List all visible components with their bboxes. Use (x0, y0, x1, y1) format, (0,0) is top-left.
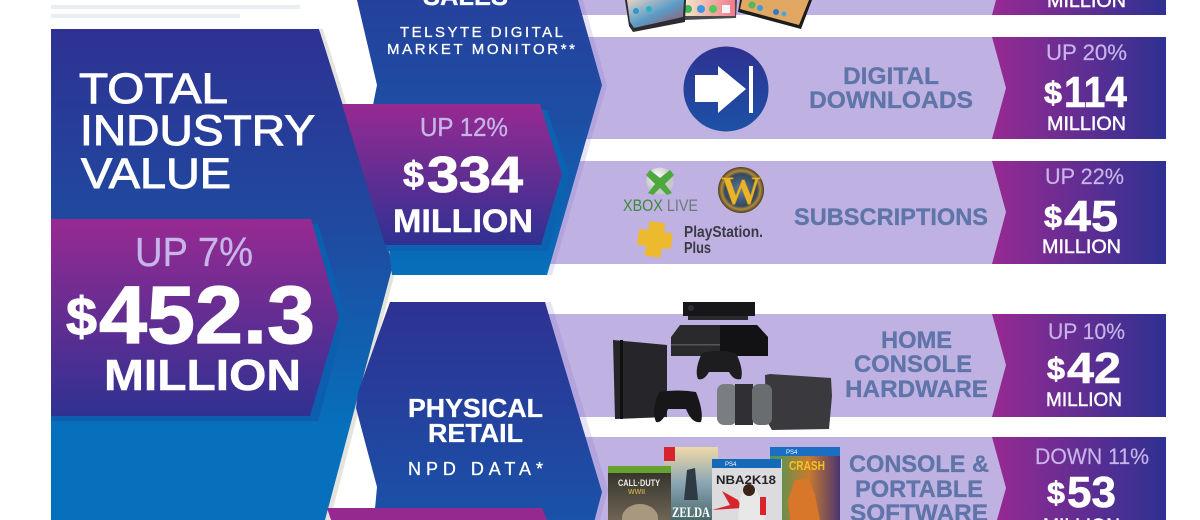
sales value badge (342, 104, 562, 245)
image: game covers: NBA2K18 (716, 473, 776, 487)
total heading: INDUSTRY (80, 107, 315, 155)
panel: mobile row (500, 0, 1166, 15)
sales source (387, 24, 575, 58)
sales value shadow (345, 110, 569, 251)
software label (849, 451, 989, 520)
total value badge: $ (66, 287, 97, 347)
physical retail heading: RETAIL (428, 418, 523, 448)
total heading: VALUE (81, 150, 231, 198)
hardware value: 42 (1067, 344, 1121, 393)
icon: playstation plus: PlayStation. (684, 224, 763, 241)
total heading (79, 65, 315, 198)
digital downloads label: DIGITAL (843, 63, 939, 90)
software label: CONSOLE & (849, 451, 989, 478)
subscriptions value (992, 161, 1166, 264)
hardware value: MILLION (1046, 390, 1122, 411)
digital downloads value: 114 (1064, 68, 1127, 117)
hardware label (845, 327, 988, 403)
sales value badge: 334 (427, 146, 524, 203)
image: game covers: CRASH (789, 458, 825, 473)
total value badge: MILLION (104, 351, 301, 400)
digital downloads label (809, 63, 973, 114)
panel: digital downloads row (500, 37, 1166, 139)
digital downloads label: DOWNLOADS (809, 87, 973, 114)
panel: mobile sales (342, 0, 602, 275)
sales value badge: UP 12% (420, 112, 508, 142)
hardware value: UP 10% (1048, 319, 1125, 344)
icon: playstation plus (636, 220, 763, 259)
software value (992, 437, 1166, 520)
image: game covers: PS4 (786, 450, 798, 456)
icon: world of warcraft: W (721, 168, 761, 213)
subscriptions value: 45 (1064, 192, 1118, 241)
sales value badge: $ (403, 154, 424, 195)
total value badge (51, 219, 339, 416)
hardware value: $ (1047, 351, 1065, 386)
panel: physical retail (327, 302, 602, 520)
digital downloads value: MILLION (1047, 114, 1126, 135)
sales source: TELSYTE DIGITAL (400, 24, 563, 41)
icon: xbox live (623, 168, 698, 215)
subscriptions value: $ (1044, 199, 1062, 234)
physical retail heading (408, 393, 543, 448)
hardware label: HARDWARE (845, 376, 988, 403)
image: consoles (613, 302, 832, 430)
total value badge: UP 7% (135, 229, 253, 275)
light shadows of the blue shapes (540, 0, 608, 520)
hardware value (992, 314, 1166, 417)
digital downloads value: $ (1044, 75, 1062, 110)
icon: xbox live: XBOX LIVE (623, 196, 698, 215)
software value: DOWN 11% (1035, 444, 1149, 469)
digital downloads value: UP 20% (1046, 40, 1127, 65)
image: mobile devices (625, 0, 812, 32)
icon: download arrow (684, 46, 768, 132)
panel: console and portable software row (500, 437, 1166, 520)
subscriptions value: MILLION (1042, 237, 1121, 258)
icon: playstation plus: Plus (684, 240, 711, 257)
image: game covers (608, 447, 840, 520)
panel: total industry value (51, 29, 393, 520)
total value shadow (51, 224, 346, 421)
physical retail value badge (327, 508, 547, 520)
hardware label: CONSOLE (854, 351, 972, 378)
hardware label: HOME (881, 327, 952, 354)
physical retail heading: PHYSICAL (408, 393, 543, 423)
image: game covers: CALL·DUTY (618, 478, 660, 488)
software value: 53 (1067, 468, 1116, 517)
software label: PORTABLE (855, 476, 983, 503)
total value badge: 452.3 (99, 270, 315, 361)
software value: $ (1047, 475, 1065, 510)
subscriptions value: UP 22% (1045, 164, 1124, 189)
subscriptions label: SUBSCRIPTIONS (794, 204, 988, 231)
mobile row value (992, 0, 1166, 15)
sales value badge: MILLION (393, 203, 533, 239)
panel: subscriptions row (500, 161, 1166, 264)
physical retail source: NPD DATA* (408, 459, 543, 479)
panel: home console hardware row (500, 302, 1166, 430)
sales source: MARKET MONITOR** (387, 41, 575, 58)
intro text lines (51, 5, 300, 18)
image: game covers: WWII (628, 489, 645, 496)
total heading: TOTAL (79, 65, 228, 113)
image: game covers: PS4 (725, 462, 737, 468)
digital downloads value (992, 37, 1166, 139)
